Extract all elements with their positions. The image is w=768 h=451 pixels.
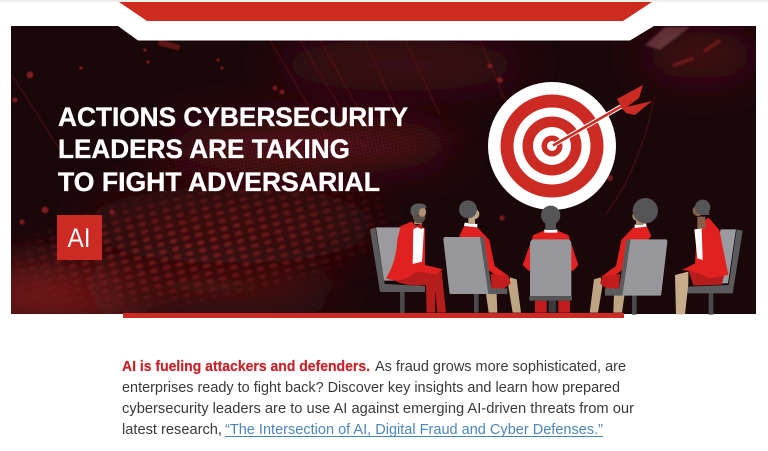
top hairline bbox=[0, 0, 768, 2]
intro paragraph bbox=[122, 358, 634, 438]
icon: target with arrow bbox=[488, 82, 652, 210]
AI badge: AI bbox=[68, 223, 90, 253]
intro paragraph: enterprises ready to fight back? Discover key insights and learn how prepared bbox=[122, 379, 620, 396]
panel: hero banner bbox=[0, 26, 760, 325]
report link: “The Intersection of AI, Digital Fraud and Cyber Defenses.” bbox=[225, 421, 603, 438]
person 4: woman with curly hair, back view bbox=[590, 198, 667, 315]
top red trapezoid band bbox=[119, 2, 652, 21]
banner background bbox=[0, 26, 760, 325]
intro paragraph: As fraud grows more sophisticated, are bbox=[375, 358, 626, 375]
person 1: man in red suit bbox=[370, 203, 446, 314]
people seated in a semicircle bbox=[370, 198, 743, 315]
person 2: woman in red, back view bbox=[443, 200, 521, 313]
person 3: center, back view bbox=[523, 206, 578, 313]
title: LEADERS ARE TAKING bbox=[58, 134, 350, 164]
person 5: woman in red jacket and skirt bbox=[675, 200, 743, 315]
AI badge bbox=[57, 215, 102, 260]
red underline bar bbox=[123, 313, 624, 318]
intro paragraph: latest research, bbox=[122, 421, 222, 438]
intro paragraph: cybersecurity leaders are to use AI against emerging AI-driven threats from our bbox=[122, 400, 634, 417]
title bbox=[58, 102, 408, 197]
bold lead-in sentence: AI is fueling attackers and defenders. bbox=[122, 358, 370, 375]
title: ACTIONS CYBERSECURITY bbox=[58, 102, 408, 132]
title: TO FIGHT ADVERSARIAL bbox=[58, 167, 380, 197]
